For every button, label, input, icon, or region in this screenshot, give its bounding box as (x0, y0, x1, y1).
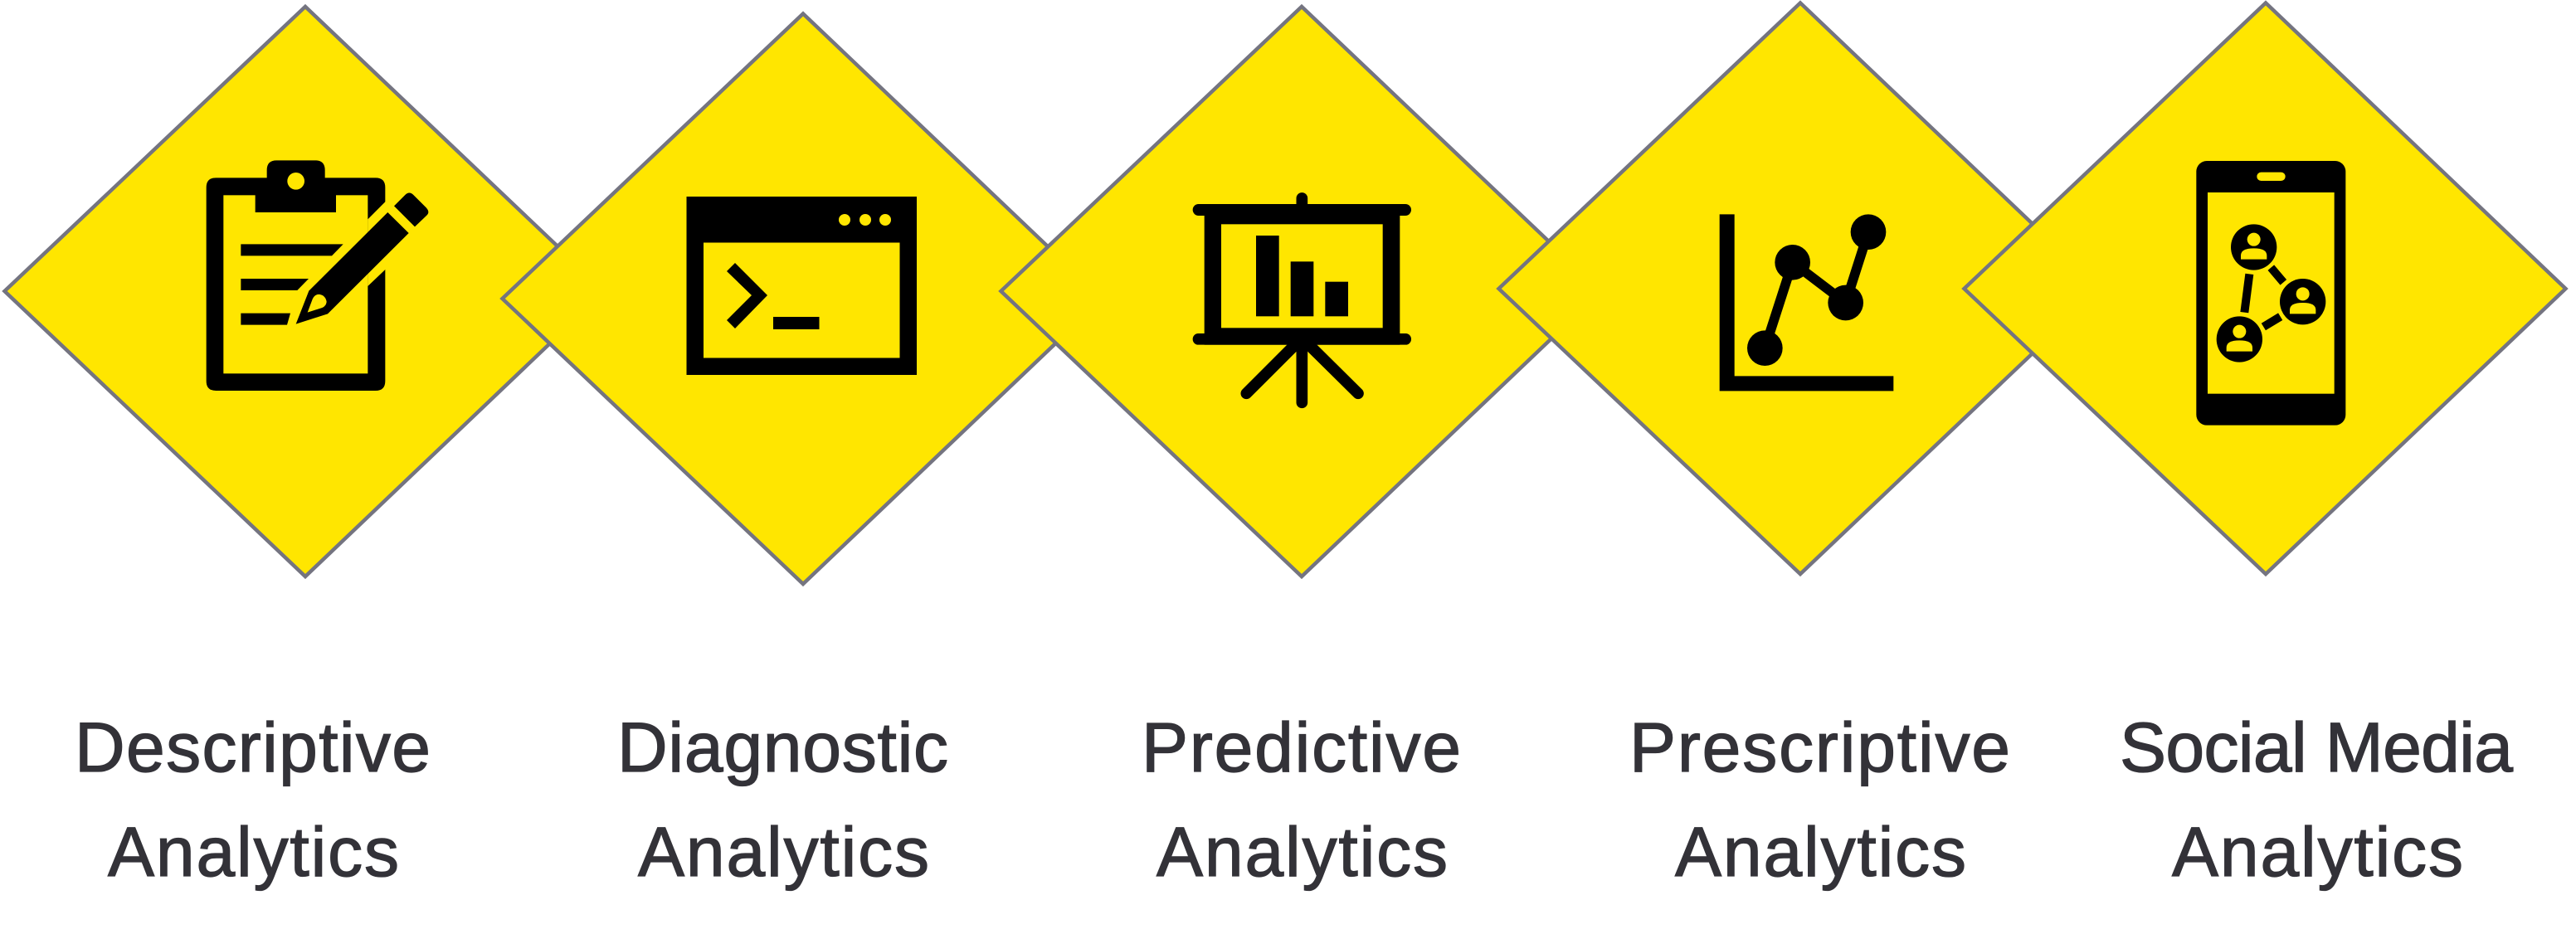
icon: clipboard with pencil (207, 160, 428, 391)
label: Prescriptive Analytics: Analytics (1675, 813, 1966, 891)
icon: smartphone with social network (2196, 161, 2345, 426)
icon: terminal window (687, 197, 917, 375)
label: Descriptive Analytics: Descriptive (75, 708, 431, 786)
label: Prescriptive Analytics: Prescriptive (1629, 708, 2010, 786)
label: Diagnostic Analytics: Analytics (638, 813, 929, 891)
label: Prescriptive Analytics (1629, 708, 2010, 891)
label: Predictive Analytics (1142, 708, 1461, 891)
diamond: prescriptive analytics (1498, 3, 2101, 574)
label: Diagnostic Analytics (617, 708, 948, 891)
icon: presentation board with bar chart (1193, 198, 1411, 402)
label: Social Media Analytics (2120, 708, 2513, 891)
label: Predictive Analytics: Analytics (1157, 813, 1448, 891)
label: Social Media Analytics: Analytics (2172, 813, 2463, 891)
label: Descriptive Analytics: Analytics (108, 813, 399, 891)
label: Social Media Analytics: Social Media (2120, 708, 2513, 786)
label: Predictive Analytics: Predictive (1142, 708, 1461, 786)
diamond: predictive analytics (1001, 7, 1601, 576)
icon: line chart with nodes (1720, 214, 1893, 391)
diamond: diagnostic analytics (503, 13, 1103, 584)
label: Descriptive Analytics (75, 708, 431, 891)
label: Diagnostic Analytics: Diagnostic (617, 708, 948, 786)
diamond: social media analytics (1965, 3, 2565, 574)
diamond: descriptive analytics (5, 7, 605, 576)
